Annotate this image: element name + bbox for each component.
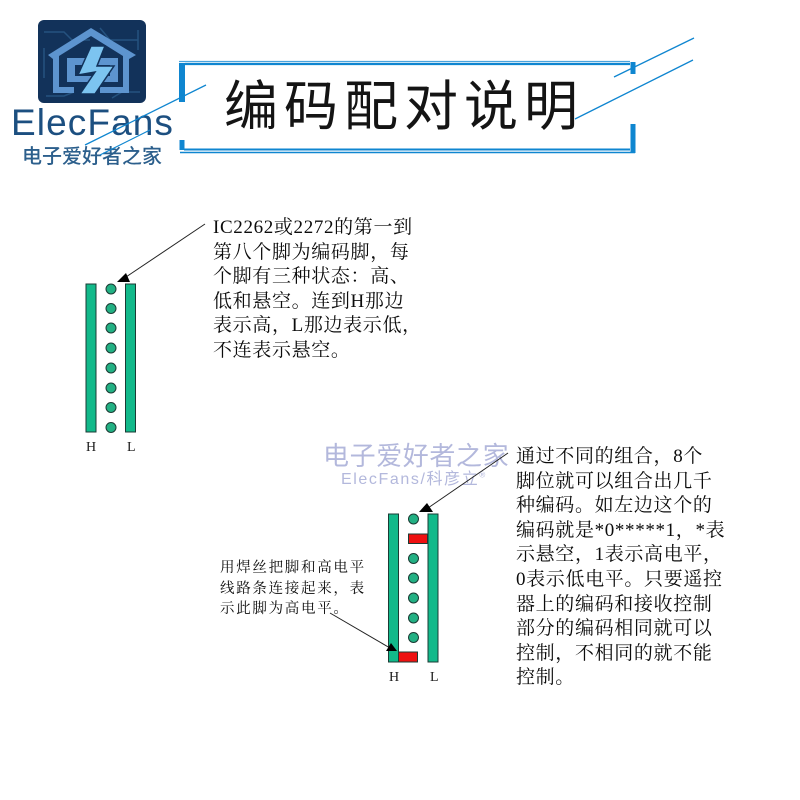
text block: combination explanation: 部分的编码相同就可以 (516, 618, 713, 639)
text block: solder note (220, 559, 366, 617)
text block: pin explanation: 不连表示悬空。 (213, 340, 351, 361)
arrow: to first pin (117, 224, 206, 282)
title: 编码配对说明 (224, 77, 584, 137)
diagram 2: rails with soldered pins: L (430, 670, 439, 685)
text block: combination explanation: 控制，不相同的就不能 (516, 643, 713, 664)
diagram 1: H/L rails with eight pins: H (86, 440, 96, 455)
brand subtitle: 电子爱好者之家 (22, 146, 162, 168)
watermark subtitle: ElecFans/科彦立® (341, 471, 485, 488)
text block: pin explanation: 表示高，L那边表示低， (213, 315, 422, 336)
title frame and accent lines (84, 37, 694, 156)
diagram 1: H/L rails with eight pins (86, 284, 136, 455)
diagram 2: rails with soldered pins: H (389, 670, 399, 685)
text block: combination explanation: 器上的编码和接收控制 (516, 594, 713, 615)
arrow: to second diagram top pin (419, 452, 508, 512)
text block: combination explanation: 控制。 (516, 667, 575, 688)
text block: combination explanation (516, 446, 725, 688)
brand name: ElecFans: ElecFans (11, 102, 174, 143)
text block: pin explanation: IC2262或2272的第一到 (213, 217, 413, 238)
text block: solder note: 用焊丝把脚和高电平 (220, 560, 366, 576)
text block: combination explanation: 种编码。如左边这个的 (516, 495, 713, 516)
text block: pin explanation (213, 217, 422, 361)
text block: solder note: 示此脚为高电平。 (220, 601, 350, 617)
text block: combination explanation: 示悬空，1表示高电平， (516, 544, 723, 565)
text block: pin explanation: 低和悬空。连到H那边 (213, 291, 404, 312)
text block: pin explanation: 第八个脚为编码脚，每 (213, 242, 410, 263)
diagram 2: rails with soldered pins (388, 514, 439, 685)
watermark: 电子爱好者之家 (323, 441, 509, 471)
text block: combination explanation: 通过不同的组合，8个 (516, 446, 703, 467)
text block: combination explanation: 0表示低电平。只要遥控 (516, 569, 723, 590)
text block: combination explanation: 编码就是*0*****1，*表 (516, 520, 725, 541)
text block: pin explanation: 个脚有三种状态：高、 (213, 266, 410, 287)
arrow: to soldered high pin (330, 612, 397, 651)
icon: house with lightning bolt logo (38, 20, 146, 103)
diagram 1: H/L rails with eight pins: L (127, 440, 136, 455)
text block: combination explanation: 脚位就可以组合出几千 (516, 471, 713, 492)
text block: solder note: 线路条连接起来，表 (220, 581, 366, 597)
